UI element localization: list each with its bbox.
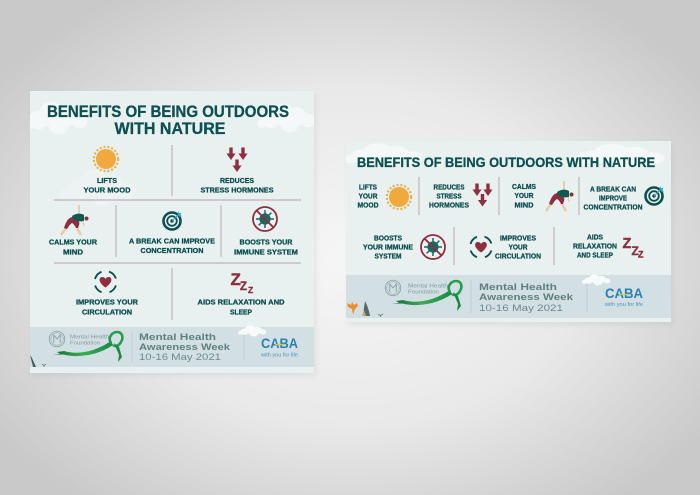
benefit: boosts your immune system: BOOSTS YOUR xyxy=(240,238,293,246)
benefit: improves your circulation: IMPROVES YOUR xyxy=(76,298,138,306)
benefit: calms your mind: YOUR xyxy=(514,191,534,200)
benefit: lifts your mood: LIFTS xyxy=(359,182,377,192)
icon: target xyxy=(646,186,664,204)
benefit: lifts your mood xyxy=(358,182,411,210)
benefit: calms your mind: MIND xyxy=(63,248,84,256)
icon: yoga figure xyxy=(61,205,88,235)
benefit: a break can improve concentration: A BREAK CAN IMPROVE xyxy=(129,236,215,246)
icon: zzz: Z xyxy=(622,236,632,252)
title: WITH NATURE xyxy=(114,120,226,138)
benefit: boosts your immune system: IMMUNE SYSTEM xyxy=(234,248,298,256)
logo: CABA xyxy=(605,286,643,308)
benefit: reduces stress hormones: REDUCES xyxy=(434,182,464,192)
logo: CABA: with you for life xyxy=(605,302,643,308)
benefit: aids relaxation and sleep xyxy=(198,270,285,316)
benefit: boosts your immune system: BOOSTS xyxy=(374,234,402,242)
benefit: calms your mind xyxy=(512,181,574,211)
benefit: aids relaxation and sleep: SLEEP xyxy=(230,308,252,316)
dividers xyxy=(54,145,301,320)
benefit: aids relaxation and sleep: AIDS xyxy=(587,232,603,242)
banner: landscape version xyxy=(346,275,671,318)
icon: green ribbon xyxy=(392,281,461,311)
panel: square version xyxy=(23,91,316,376)
benefit: boosts your immune system: YOUR IMMUNE xyxy=(363,242,413,252)
benefit: reduces stress hormones: STRESS xyxy=(436,192,462,200)
icon: zzz: Z xyxy=(240,281,247,293)
benefit: reduces stress hormones: HORMONES xyxy=(429,200,469,210)
logo: CABA xyxy=(261,336,298,358)
benefit: improves your circulation: CIRCULATION xyxy=(82,308,132,316)
cloud xyxy=(582,275,610,285)
benefit: improves your circulation: IMPROVES xyxy=(500,234,536,242)
icon: target xyxy=(164,211,182,230)
icon: arrows xyxy=(472,184,493,206)
icon: heart xyxy=(95,272,116,292)
icon: zzz xyxy=(622,236,644,260)
benefit: lifts your mood: MOOD xyxy=(358,200,379,210)
campaign text: Awareness Week xyxy=(139,342,231,353)
benefit: improves your circulation xyxy=(470,234,541,260)
benefit: boosts your immune system xyxy=(363,234,445,260)
benefit: reduces stress hormones xyxy=(429,182,493,210)
logo: Mental Health Foundation: Mental Health xyxy=(408,284,448,290)
icon: sun xyxy=(387,185,411,209)
logo: Mental Health Foundation xyxy=(385,280,448,296)
benefit: reduces stress hormones xyxy=(200,148,274,194)
benefit: aids relaxation and sleep: AND SLEEP xyxy=(577,250,613,260)
title: BENEFITS OF BEING OUTDOORS xyxy=(47,103,289,121)
benefit: lifts your mood: YOUR MOOD xyxy=(84,186,131,194)
benefit: lifts your mood: LIFTS xyxy=(97,176,117,185)
campaign text: Awareness Week xyxy=(479,292,574,303)
plant xyxy=(30,355,46,367)
campaign text xyxy=(139,332,231,363)
logo: Mental Health Foundation: Mental Health xyxy=(70,334,109,340)
benefit: aids relaxation and sleep: AIDS RELAXATION AND xyxy=(198,298,285,306)
title xyxy=(47,103,289,138)
benefit: a break can improve concentration xyxy=(129,211,215,255)
logo: CABA: CABA xyxy=(605,286,643,301)
benefit: calms your mind: MIND xyxy=(514,200,534,210)
icon: green ribbon xyxy=(53,332,122,362)
campaign text: 10-16 May 2021 xyxy=(479,303,563,314)
banner: square version xyxy=(30,326,314,367)
benefit: calms your mind: CALMS YOUR xyxy=(49,238,97,246)
logo: Mental Health Foundation: Foundation xyxy=(408,290,439,296)
logo: CABA: with you for life xyxy=(261,352,298,358)
benefit: a break can improve concentration: CONCENTRATION xyxy=(140,246,204,255)
benefit: lifts your mood: YOUR xyxy=(358,192,378,200)
cloud xyxy=(238,326,266,336)
icon: crossed virus xyxy=(253,207,277,231)
benefit: lifts your mood xyxy=(84,147,131,194)
logo: Mental Health Foundation: Foundation xyxy=(70,340,100,346)
title: BENEFITS OF BEING OUTDOORS WITH NATURE xyxy=(357,154,655,170)
benefit: improves your circulation xyxy=(76,272,138,316)
benefit: boosts your immune system xyxy=(234,207,298,256)
icon: zzz: Z xyxy=(632,244,639,258)
panel: landscape version xyxy=(344,141,673,325)
icon: orange flower xyxy=(347,302,358,315)
logo: Mental Health Foundation xyxy=(49,331,109,347)
benefit: a break can improve concentration: CONCENTRATION xyxy=(584,202,642,212)
campaign text: Mental Health xyxy=(139,332,216,343)
benefit: reduces stress hormones: STRESS HORMONES xyxy=(200,186,274,194)
icon: zzz: Z xyxy=(230,270,241,289)
benefit: a break can improve concentration: IMPROVE xyxy=(599,194,627,202)
benefit: a break can improve concentration: A BREAK CAN xyxy=(590,184,636,194)
plant xyxy=(362,301,383,317)
icon: yoga figure xyxy=(546,181,574,211)
campaign text xyxy=(479,282,574,314)
icon: heart xyxy=(470,237,491,257)
icon: sun xyxy=(94,147,118,171)
benefit: improves your circulation: YOUR xyxy=(508,242,528,252)
icon: arrows xyxy=(226,148,248,172)
benefit: aids relaxation and sleep: RELAXATION xyxy=(573,242,617,250)
benefit: reduces stress hormones: REDUCES xyxy=(220,176,254,185)
benefit: aids relaxation and sleep xyxy=(573,232,644,260)
benefit: calms your mind: CALMS xyxy=(512,182,536,191)
icon: zzz: Z xyxy=(638,250,644,260)
benefit: improves your circulation: CIRCULATION xyxy=(495,252,541,260)
icon: zzz: Z xyxy=(248,285,253,295)
benefit: a break can improve concentration xyxy=(584,184,664,212)
campaign text: 10-16 May 2021 xyxy=(139,352,221,363)
benefit: calms your mind xyxy=(49,205,97,256)
icon: zzz xyxy=(230,270,253,295)
campaign text: Mental Health xyxy=(479,282,557,293)
logo: CABA: CABA xyxy=(261,336,298,351)
icon: crossed virus xyxy=(421,235,445,259)
dividers xyxy=(419,177,579,265)
benefit: boosts your immune system: SYSTEM xyxy=(374,252,402,260)
